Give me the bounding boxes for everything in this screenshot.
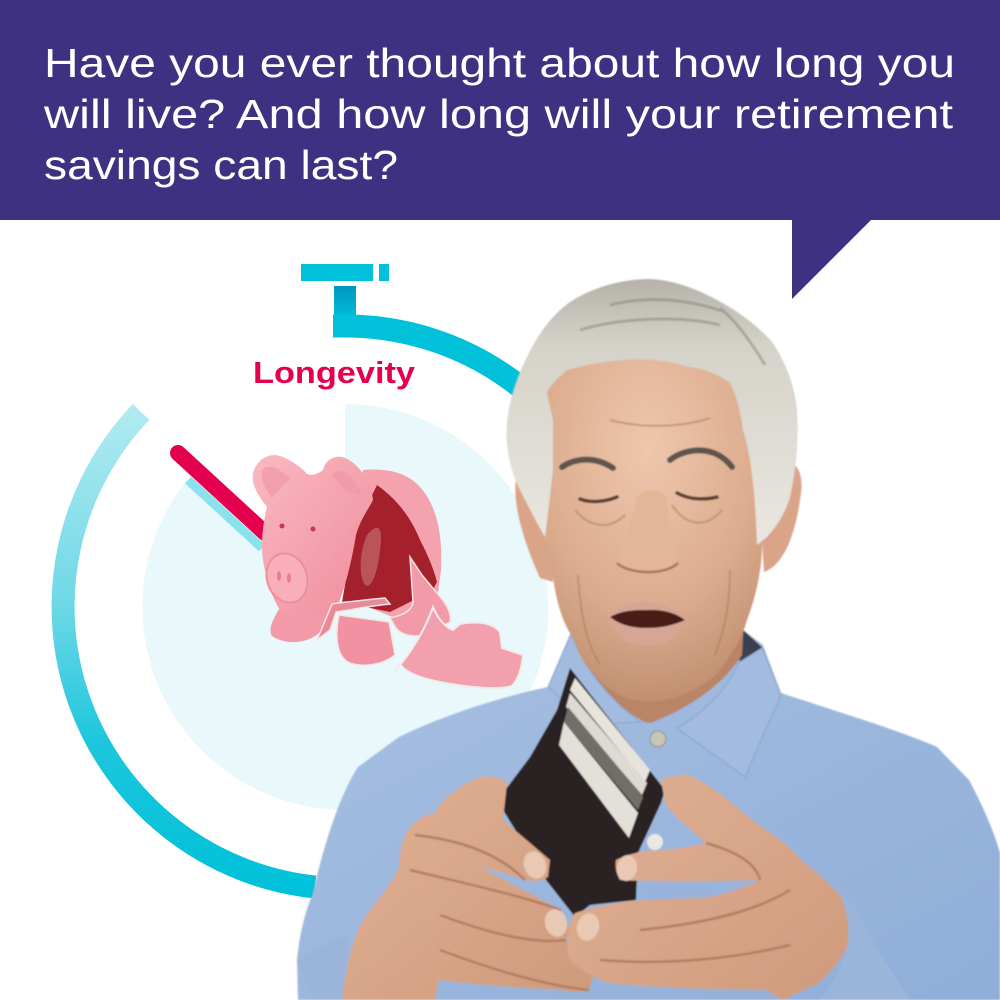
- title: will live? And how long will your retirement: [43, 91, 954, 137]
- piggy ear inners: [262, 467, 362, 498]
- piggy feet: [270, 606, 333, 642]
- right hand creases: [600, 843, 790, 962]
- mouth: [608, 602, 685, 645]
- shirt cuffs: [297, 887, 910, 1000]
- eye bags and wrinkles: [575, 418, 730, 665]
- stopwatch crown: [301, 264, 389, 316]
- left hand: [342, 777, 593, 1000]
- ears: [515, 463, 802, 582]
- title: [43, 40, 955, 188]
- eyes: [580, 493, 717, 501]
- piggy back shell: [350, 470, 441, 620]
- lower button: [647, 834, 663, 850]
- ring arc left: [63, 412, 315, 887]
- stopwatch graphic: [63, 264, 548, 887]
- cracked rim: [317, 598, 390, 640]
- placket: [625, 722, 677, 800]
- light dial disc: [142, 404, 548, 810]
- title: savings can last?: [44, 142, 398, 188]
- shirt: [297, 630, 1000, 1000]
- collar left: [548, 634, 640, 725]
- shirt button: [650, 731, 666, 747]
- dial hand: [178, 453, 265, 548]
- right hand: [567, 775, 853, 1000]
- neck: [570, 600, 745, 724]
- longevity label: Longevity: [253, 355, 416, 390]
- piggy nostrils: [277, 571, 291, 583]
- piggy snout: [260, 548, 314, 608]
- inner collar shadow: [732, 630, 762, 668]
- man photo illustration: [297, 279, 1000, 1000]
- left hand creases: [410, 835, 589, 990]
- title: Have you ever thought about how long you: [44, 40, 955, 86]
- big shard: [393, 607, 523, 688]
- eyebrows: [562, 450, 732, 468]
- face: [525, 340, 770, 702]
- fingernails: [520, 848, 639, 943]
- piggy eyes: [280, 524, 316, 532]
- nose: [617, 490, 678, 572]
- hair strands: [580, 300, 765, 365]
- header speech banner: [0, 0, 1000, 299]
- nose shadow: [617, 563, 678, 572]
- icon: broken piggy bank: [253, 455, 523, 688]
- middle shard: [337, 615, 395, 665]
- wallet: [503, 668, 665, 917]
- ring arc upper: [333, 326, 524, 390]
- hair: [506, 279, 798, 545]
- collar right: [677, 648, 781, 777]
- piggy interior: [342, 485, 437, 612]
- interior highlight: [361, 528, 381, 586]
- piggy body: [253, 455, 373, 619]
- shell fragment: [390, 557, 450, 636]
